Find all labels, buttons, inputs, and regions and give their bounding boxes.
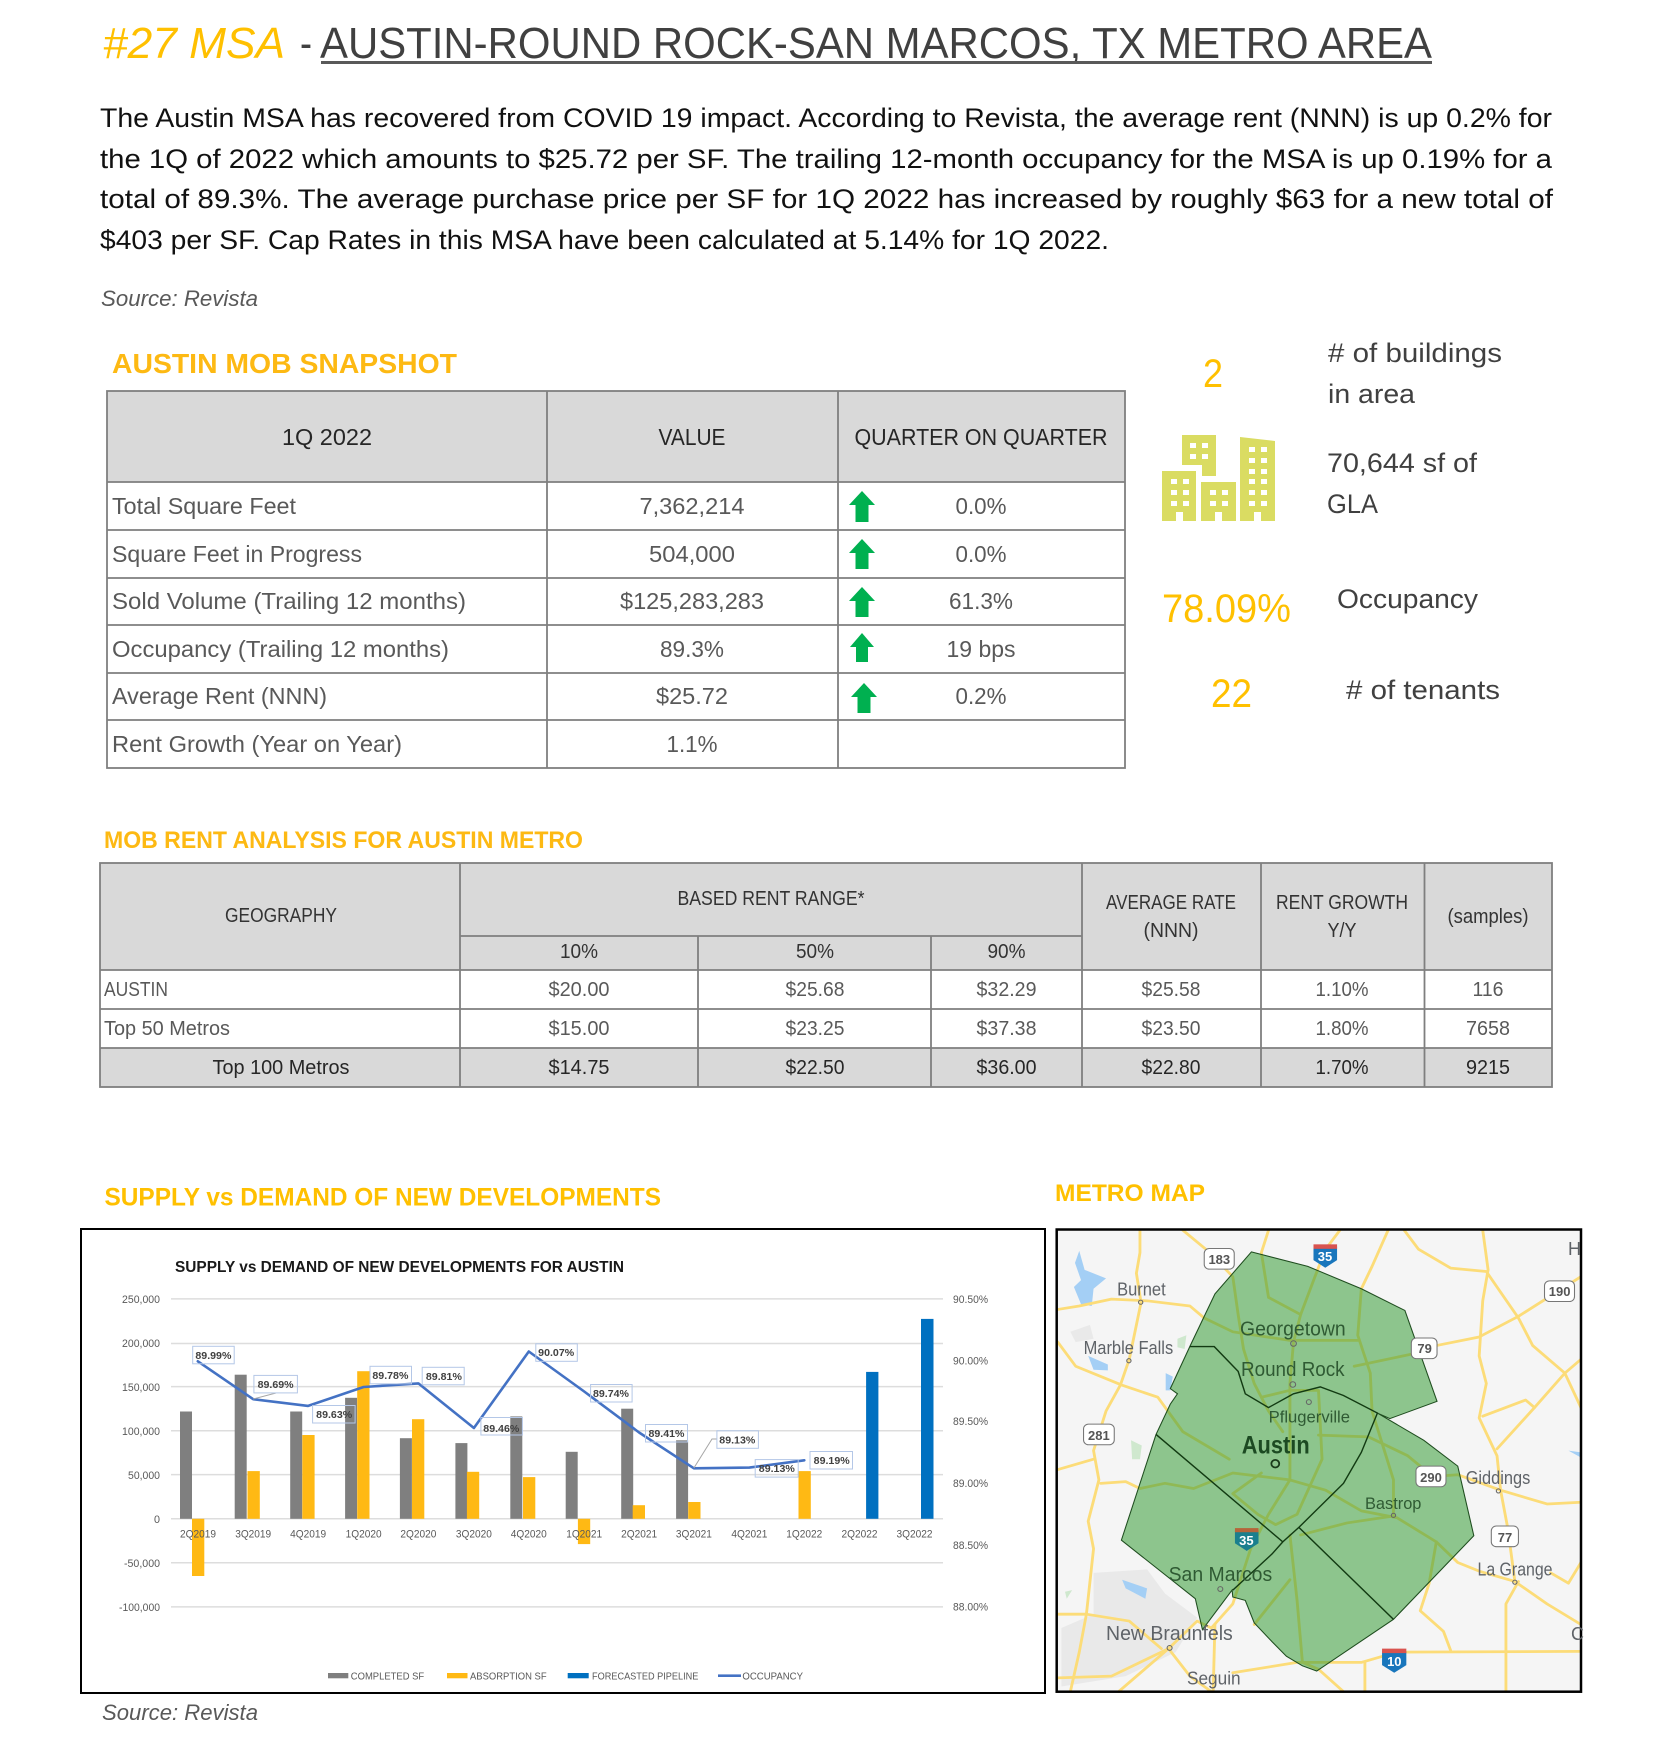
category labels: 4Q2020 bbox=[511, 1528, 547, 1540]
rent table header: Y/Y bbox=[1328, 920, 1356, 942]
rent row: Top 50 Metros: $23.50 bbox=[1142, 1018, 1200, 1040]
rent row: Top 50 Metros: $37.38 bbox=[976, 1018, 1036, 1040]
icon: buildings bbox=[1162, 435, 1275, 521]
left axis labels: 0 bbox=[154, 1514, 160, 1526]
map place labels: La Grange bbox=[1478, 1560, 1552, 1580]
icons: green up arrows bbox=[849, 491, 877, 713]
map place labels: Georgetown bbox=[1240, 1318, 1346, 1340]
stat: number of buildings: # of buildings bbox=[1328, 338, 1502, 368]
rent row: Top 100 Metros bbox=[212, 1057, 1510, 1079]
chart legend: COMPLETED SF bbox=[351, 1670, 424, 1682]
stat: number of tenants: 22 bbox=[1211, 672, 1252, 716]
chart legend: OCCUPANCY bbox=[742, 1670, 803, 1682]
stat: gross leasable area bbox=[1327, 448, 1478, 519]
rent row: Austin: 1.10% bbox=[1316, 979, 1369, 1001]
rent table header: 50% bbox=[796, 941, 834, 963]
title: #27 MSA bbox=[103, 19, 285, 68]
chart title: SUPPLY vs DEMAND OF NEW DEVELOPMENTS FOR AUSTIN bbox=[175, 1259, 624, 1276]
category labels: 3Q2020 bbox=[456, 1528, 492, 1540]
category labels: 3Q2022 bbox=[896, 1528, 932, 1540]
category labels: 2Q2019 bbox=[180, 1528, 216, 1540]
rent row: Top 50 Metros: Top 50 Metros bbox=[104, 1018, 230, 1040]
rent row: Austin: AUSTIN bbox=[104, 979, 168, 1001]
snapshot table rows: $125,283,283 bbox=[620, 588, 764, 614]
map route numbers: 79 bbox=[1417, 1341, 1432, 1356]
right axis labels: 90.50% bbox=[953, 1294, 988, 1306]
rent row: Top 50 Metros: 1.80% bbox=[1316, 1018, 1369, 1040]
rent row: Top 100 Metros: $36.00 bbox=[976, 1057, 1036, 1079]
stat: occupancy bbox=[1162, 584, 1479, 631]
stat: occupancy: Occupancy bbox=[1337, 584, 1479, 614]
category labels: 1Q2021 bbox=[566, 1528, 602, 1540]
stat: number of buildings: in area bbox=[1328, 379, 1416, 409]
map place labels bbox=[1084, 1239, 1584, 1688]
left axis labels: 100,000 bbox=[122, 1426, 160, 1438]
US route shields bbox=[1084, 1248, 1575, 1547]
intro paragraph: total of 89.3%. The average purchase price per SF for 1Q 2022 has increased by roughly $63 for a new total of bbox=[100, 184, 1554, 214]
snapshot table rows: 7,362,214 bbox=[640, 493, 745, 519]
map place labels: H bbox=[1568, 1239, 1581, 1259]
left axis labels: -100,000 bbox=[119, 1602, 160, 1614]
rent table header: 10% bbox=[560, 941, 598, 963]
snapshot table rows: Occupancy (Trailing 12 months) bbox=[112, 636, 449, 662]
rent row: Top 50 Metros bbox=[104, 1018, 1510, 1040]
snapshot table header bbox=[282, 424, 1108, 450]
category labels: 4Q2019 bbox=[290, 1528, 326, 1540]
snapshot table rows: 61.3% bbox=[949, 588, 1013, 614]
intro paragraph bbox=[100, 103, 1554, 255]
rent row: Top 50 Metros: $23.25 bbox=[786, 1018, 844, 1040]
snapshot table rows: 0.0% bbox=[956, 541, 1006, 567]
map route numbers: 35 bbox=[1239, 1533, 1254, 1548]
category labels bbox=[180, 1528, 932, 1540]
category labels: 2Q2020 bbox=[400, 1528, 436, 1540]
left axis labels bbox=[119, 1294, 160, 1614]
stat: occupancy: 78.09% bbox=[1162, 587, 1291, 631]
stat: gross leasable area: GLA bbox=[1327, 489, 1378, 519]
snapshot table rows: Sold Volume (Trailing 12 months) bbox=[112, 588, 466, 614]
category labels: 4Q2021 bbox=[731, 1528, 767, 1540]
category labels: 1Q2022 bbox=[786, 1528, 822, 1540]
chart legend bbox=[328, 1670, 803, 1682]
rent table header: 90% bbox=[988, 941, 1026, 963]
rent table header: AVERAGE RATE bbox=[1106, 892, 1236, 914]
bars: absorption SF bbox=[192, 1371, 811, 1576]
occupancy data labels: 89.78% bbox=[372, 1370, 409, 1382]
occupancy data labels: 89.46% bbox=[483, 1423, 520, 1435]
metro area polygon bbox=[1121, 1252, 1474, 1671]
stat: number of tenants bbox=[1211, 672, 1500, 716]
rent table header: (samples) bbox=[1448, 906, 1528, 928]
source note: chart: Source: Revista bbox=[102, 1700, 258, 1725]
rent table header: GEOGRAPHY bbox=[225, 905, 337, 927]
map place labels: Bastrop bbox=[1365, 1494, 1421, 1513]
map place labels: C bbox=[1571, 1624, 1584, 1644]
right axis labels bbox=[953, 1294, 988, 1614]
snapshot table header: 1Q 2022 bbox=[282, 424, 372, 450]
snapshot table rows: $25.72 bbox=[656, 683, 728, 709]
occupancy data labels: 89.99% bbox=[195, 1350, 232, 1362]
title: - bbox=[300, 19, 312, 68]
occupancy line bbox=[198, 1352, 804, 1468]
rent row: Austin: 116 bbox=[1472, 979, 1504, 1001]
bars: completed SF bbox=[180, 1375, 688, 1519]
occupancy data labels: 89.63% bbox=[316, 1409, 353, 1421]
snapshot table rows: 504,000 bbox=[649, 541, 735, 567]
stat: number of buildings: 2 bbox=[1203, 352, 1223, 396]
rent table header: (NNN) bbox=[1144, 920, 1198, 942]
heading: metro map: METRO MAP bbox=[1055, 1180, 1205, 1207]
category labels: 1Q2020 bbox=[346, 1528, 382, 1540]
stat: gross leasable area: 70,644 sf of bbox=[1327, 448, 1478, 478]
map place labels: Giddings bbox=[1466, 1468, 1530, 1488]
rent row: Top 100 Metros: $22.50 bbox=[786, 1057, 844, 1079]
snapshot table header: QUARTER ON QUARTER bbox=[854, 424, 1108, 450]
map place labels: Marble Falls bbox=[1084, 1338, 1173, 1358]
rent row: Top 50 Metros: 7658 bbox=[1466, 1018, 1510, 1040]
snapshot table rows bbox=[112, 493, 1016, 757]
city markers bbox=[1127, 1300, 1517, 1650]
map route numbers: 77 bbox=[1498, 1530, 1512, 1545]
map place labels: San Marcos bbox=[1169, 1564, 1272, 1586]
rent row: Austin bbox=[104, 979, 1504, 1001]
left axis labels: 50,000 bbox=[128, 1470, 160, 1482]
rent row: Top 100 Metros: 1.70% bbox=[1316, 1057, 1369, 1079]
bars: forecasted pipeline bbox=[866, 1319, 934, 1519]
snapshot table header: VALUE bbox=[658, 424, 726, 450]
rent row: Top 100 Metros: 9215 bbox=[1466, 1057, 1510, 1079]
snapshot table rows: 19 bps bbox=[946, 636, 1016, 662]
snapshot table rows: Average Rent (NNN) bbox=[112, 683, 327, 709]
right axis labels: 89.00% bbox=[953, 1478, 988, 1490]
snapshot table rows: Square Feet in Progress bbox=[112, 541, 362, 567]
heading: rent analysis: MOB RENT ANALYSIS FOR AUSTIN METRO bbox=[104, 827, 583, 854]
rent row: Top 100 Metros: $22.80 bbox=[1142, 1057, 1200, 1079]
stat: number of buildings bbox=[1203, 338, 1502, 409]
category labels: 2Q2021 bbox=[621, 1528, 657, 1540]
map place labels: New Braunfels bbox=[1106, 1623, 1233, 1645]
map place labels: Pflugerville bbox=[1269, 1407, 1350, 1426]
category labels: 3Q2021 bbox=[676, 1528, 712, 1540]
heading: Austin MOB snapshot: AUSTIN MOB SNAPSHOT bbox=[112, 348, 457, 379]
snapshot table rows: Total Square Feet bbox=[112, 493, 297, 519]
rent table header bbox=[225, 888, 1528, 963]
right axis labels: 88.50% bbox=[953, 1540, 988, 1552]
chart panel: supply vs demand bbox=[81, 1229, 1045, 1693]
rent table header: RENT GROWTH bbox=[1276, 892, 1408, 914]
right axis labels: 89.50% bbox=[953, 1416, 988, 1428]
occupancy data labels: 89.13% bbox=[719, 1434, 756, 1446]
intro paragraph: the 1Q of 2022 which amounts to $25.72 per SF. The trailing 12-month occupancy for the MSA is up 0.19% for a bbox=[100, 144, 1553, 174]
panel: metro map bbox=[1056, 1228, 1584, 1693]
map route numbers: 35 bbox=[1318, 1249, 1332, 1264]
right axis labels: 88.00% bbox=[953, 1602, 988, 1614]
occupancy data labels: 89.81% bbox=[426, 1371, 463, 1383]
map route numbers: 10 bbox=[1387, 1654, 1402, 1669]
occupancy data labels: 89.13% bbox=[759, 1463, 795, 1475]
intro paragraph: The Austin MSA has recovered from COVID 19 impact. According to Revista, the average rent (NNN) is up 0.2% for bbox=[100, 103, 1552, 133]
title: AUSTIN-ROUND ROCK-SAN MARCOS, TX METRO AREA bbox=[320, 19, 1433, 68]
rent row: Austin: $25.68 bbox=[786, 979, 844, 1001]
chart legend: FORECASTED PIPELINE bbox=[592, 1670, 698, 1682]
snapshot table bbox=[107, 391, 1125, 768]
map route numbers: 281 bbox=[1088, 1428, 1110, 1443]
occupancy data labels: 89.74% bbox=[593, 1388, 630, 1400]
heading: supply vs demand: SUPPLY vs DEMAND OF NEW DEVELOPMENTS bbox=[104, 1184, 661, 1212]
occupancy data labels: 89.41% bbox=[648, 1428, 685, 1440]
rent row: Top 100 Metros: Top 100 Metros bbox=[212, 1057, 350, 1079]
interstate shields bbox=[1235, 1244, 1406, 1673]
source note: Source: Revista bbox=[101, 286, 258, 311]
map place labels: Round Rock bbox=[1241, 1359, 1346, 1381]
left axis labels: 250,000 bbox=[122, 1294, 160, 1306]
rent analysis table bbox=[100, 863, 1552, 1087]
category labels: 2Q2022 bbox=[842, 1528, 878, 1540]
rent row: Austin: $25.58 bbox=[1142, 979, 1200, 1001]
stat: number of tenants: # of tenants bbox=[1346, 675, 1500, 705]
rent table header: BASED RENT RANGE* bbox=[678, 888, 865, 910]
occupancy data labels: 89.69% bbox=[258, 1379, 294, 1391]
chart legend: ABSORPTION SF bbox=[470, 1670, 547, 1682]
category labels: 3Q2019 bbox=[235, 1528, 271, 1540]
right axis labels: 90.00% bbox=[953, 1356, 988, 1368]
left axis labels: 150,000 bbox=[122, 1382, 160, 1394]
rent row: Austin: $32.29 bbox=[976, 979, 1036, 1001]
map route numbers: 190 bbox=[1549, 1284, 1570, 1299]
occupancy data labels bbox=[193, 1344, 852, 1477]
occupancy data labels: 89.19% bbox=[814, 1455, 850, 1467]
map route numbers: 183 bbox=[1208, 1252, 1230, 1267]
rent row: Top 50 Metros: $15.00 bbox=[548, 1018, 610, 1040]
map route numbers bbox=[1088, 1249, 1570, 1669]
map place labels: Burnet bbox=[1117, 1280, 1166, 1300]
snapshot table rows: 0.0% bbox=[956, 493, 1006, 519]
left axis labels: 200,000 bbox=[122, 1338, 160, 1350]
rent row: Top 100 Metros: $14.75 bbox=[548, 1057, 610, 1079]
map place labels: Austin bbox=[1242, 1431, 1310, 1459]
snapshot table rows: Rent Growth (Year on Year) bbox=[112, 731, 402, 757]
snapshot table rows: 89.3% bbox=[660, 636, 724, 662]
map place labels: Seguin bbox=[1187, 1668, 1241, 1688]
snapshot table rows: 1.1% bbox=[666, 731, 718, 757]
intro paragraph: $403 per SF. Cap Rates in this MSA have been calculated at 5.14% for 1Q 2022. bbox=[100, 225, 1109, 255]
occupancy data labels: 90.07% bbox=[538, 1347, 575, 1359]
map route numbers: 290 bbox=[1420, 1470, 1442, 1485]
rent row: Austin: $20.00 bbox=[548, 979, 610, 1001]
left axis labels: -50,000 bbox=[124, 1558, 160, 1570]
county boundaries bbox=[1156, 1347, 1393, 1619]
snapshot table rows: 0.2% bbox=[956, 683, 1006, 709]
